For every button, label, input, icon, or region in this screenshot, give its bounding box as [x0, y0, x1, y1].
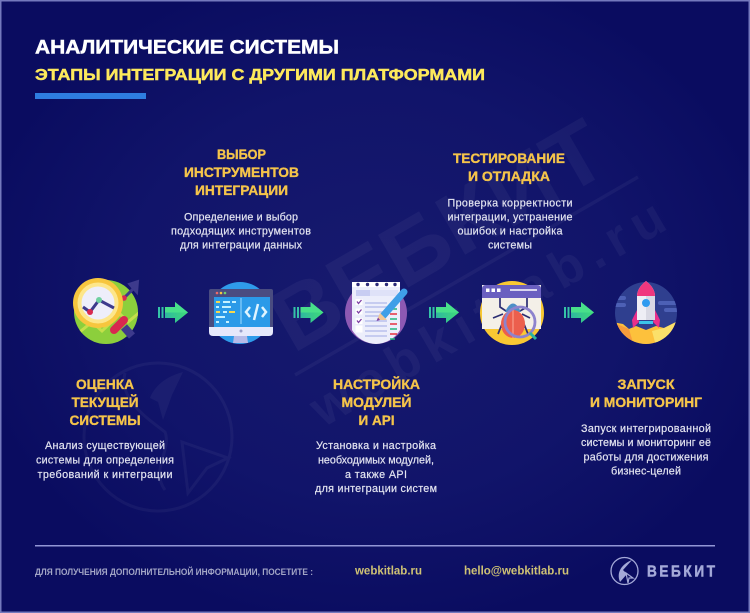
watermark: webkitlab.ru — [299, 188, 675, 439]
heading: module setup: И API — [358, 412, 394, 428]
arrow 4 — [564, 302, 594, 323]
step 3: module setup — [315, 282, 437, 495]
description: module setup: необходимых модулей, — [318, 454, 434, 466]
footer divider — [35, 545, 715, 546]
heading: testing: ТЕСТИРОВАНИЕ — [453, 150, 565, 166]
heading: assessment: СИСТЕМЫ — [70, 412, 140, 428]
description: launch: работы для достижения — [584, 452, 709, 464]
heading: tool selection: ВЫБОР — [217, 146, 266, 162]
description: launch: Запуск интегрированной — [581, 423, 711, 435]
description: assessment: системы для определения — [36, 454, 174, 466]
description: assessment: Анализ существующей — [45, 440, 165, 452]
description: tool selection: для интеграции данных — [180, 240, 303, 252]
description: testing: Проверка корректности — [448, 198, 572, 210]
description: module setup — [315, 440, 437, 495]
arrow 1 — [158, 302, 188, 323]
subtitle: ЭТАПЫ ИНТЕГРАЦИИ С ДРУГИМИ ПЛАТФОРМАМИ — [35, 67, 485, 84]
description: module setup: Установка и настройка — [316, 440, 436, 452]
description: module setup: а также API — [345, 469, 407, 481]
arrow 3 — [429, 302, 459, 323]
icon: magnifier over chart — [73, 278, 140, 344]
heading: tool selection — [184, 146, 299, 198]
title: АНАЛИТИЧЕСКИЕ СИСТЕМЫ — [35, 36, 339, 58]
description: launch — [581, 423, 711, 478]
footer logo — [611, 558, 715, 584]
heading: assessment: ТЕКУЩЕЙ — [72, 393, 138, 410]
heading: module setup — [333, 375, 420, 428]
footer email: hello@webkitlab.ru — [464, 564, 569, 578]
description: module setup: для интеграции систем — [315, 483, 437, 495]
footer prompt: ДЛЯ ПОЛУЧЕНИЯ ДОПОЛНИТЕЛЬНОЙ ИНФОРМАЦИИ, ПОСЕТИТЕ : — [35, 566, 313, 577]
title accent bar — [35, 93, 146, 99]
step 1: assessment — [36, 278, 174, 481]
description: assessment — [36, 440, 174, 481]
watermark: ВЕБКИТ — [253, 100, 623, 370]
description: tool selection: подходящих инструментов — [171, 226, 311, 238]
description: tool selection: Определение и выбор — [184, 212, 298, 224]
heading: module setup: МОДУЛЕЙ — [342, 393, 412, 410]
footer website: webkitlab.ru — [354, 564, 422, 578]
step 2: tool selection — [171, 146, 311, 344]
heading: testing: И ОТЛАДКА — [468, 168, 550, 184]
description: launch: системы и мониторинг её — [581, 437, 711, 449]
heading: assessment — [70, 376, 140, 428]
heading: launch — [590, 376, 702, 410]
heading: tool selection: ИНТЕГРАЦИИ — [195, 182, 288, 198]
description: testing: системы — [488, 240, 532, 252]
icon: bug in browser — [480, 281, 544, 345]
description: testing — [448, 198, 572, 252]
icon: code monitor — [209, 282, 273, 344]
watermark — [84, 100, 675, 511]
icon: logo globe — [611, 558, 638, 584]
heading: testing — [453, 150, 565, 184]
heading: module setup: НАСТРОЙКА — [333, 375, 420, 392]
arrow 2 — [294, 302, 324, 323]
heading: assessment: ОЦЕНКА — [76, 376, 134, 392]
heading: launch: ЗАПУСК — [618, 376, 675, 392]
description: launch: бизнес-целей — [611, 466, 681, 478]
heading: tool selection: ИНСТРУМЕНТОВ — [184, 164, 299, 180]
description: testing: ошибок и настройка — [458, 226, 562, 238]
description: assessment: требований к интеграции — [38, 469, 172, 481]
icon: checklist with pencil — [345, 282, 407, 344]
heading: launch: И МОНИТОРИНГ — [590, 394, 702, 410]
step 4: testing — [448, 150, 572, 345]
logo wordmark: ВЕБКИТ — [647, 564, 715, 581]
description: testing: интеграции, устранение — [448, 212, 572, 224]
icon: rocket — [615, 281, 677, 344]
step 5: launch — [581, 281, 711, 478]
description: tool selection — [171, 212, 311, 252]
